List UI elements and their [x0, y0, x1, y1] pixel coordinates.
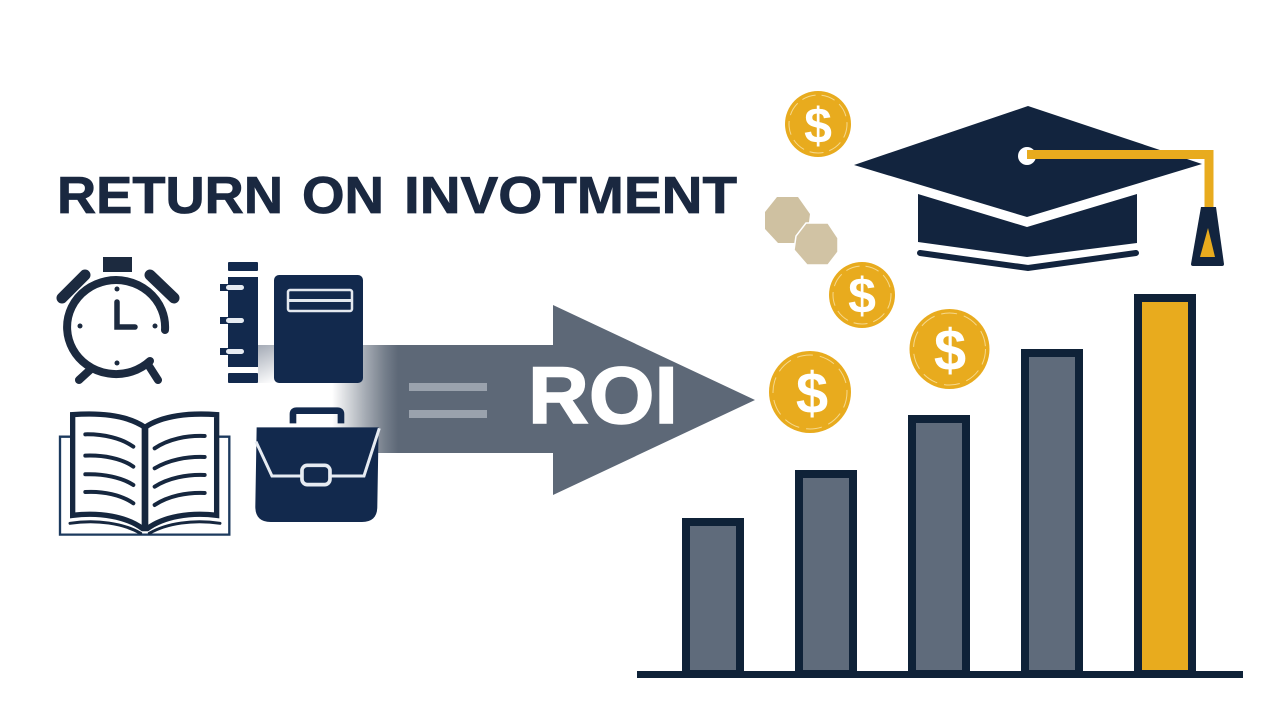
title: INVOTMENT [404, 167, 737, 225]
icon: open book [60, 414, 229, 535]
bar 4 [1025, 353, 1079, 674]
coin: left: $ [796, 361, 828, 426]
arrow: inputs to ROI [258, 305, 755, 495]
equals sign [409, 383, 487, 418]
axis [637, 671, 1243, 678]
coin: top [785, 91, 851, 157]
icon: binder [220, 262, 258, 383]
ROI label: ROI [528, 351, 678, 441]
coin: right [910, 309, 990, 389]
bar 3 [912, 419, 966, 674]
tassel [1191, 207, 1224, 266]
tassel cord [1027, 154, 1209, 210]
coin: hexagon pair [765, 197, 838, 265]
coin: middle [829, 262, 895, 328]
coin: middle: $ [848, 268, 876, 324]
icon: graduation cap [854, 106, 1224, 268]
coin: right: $ [934, 318, 966, 383]
bar 5 highlighted [1138, 298, 1192, 674]
bar 2 [799, 474, 853, 674]
icon: alarm clock [62, 257, 174, 380]
coin: top: $ [804, 98, 832, 154]
title: ON [302, 167, 384, 225]
title: RETURN [57, 167, 283, 225]
icon: notebook [274, 275, 363, 383]
bar chart [637, 298, 1243, 678]
coin: left [769, 351, 851, 433]
bar 1 [686, 522, 740, 674]
icon: briefcase [255, 411, 379, 522]
